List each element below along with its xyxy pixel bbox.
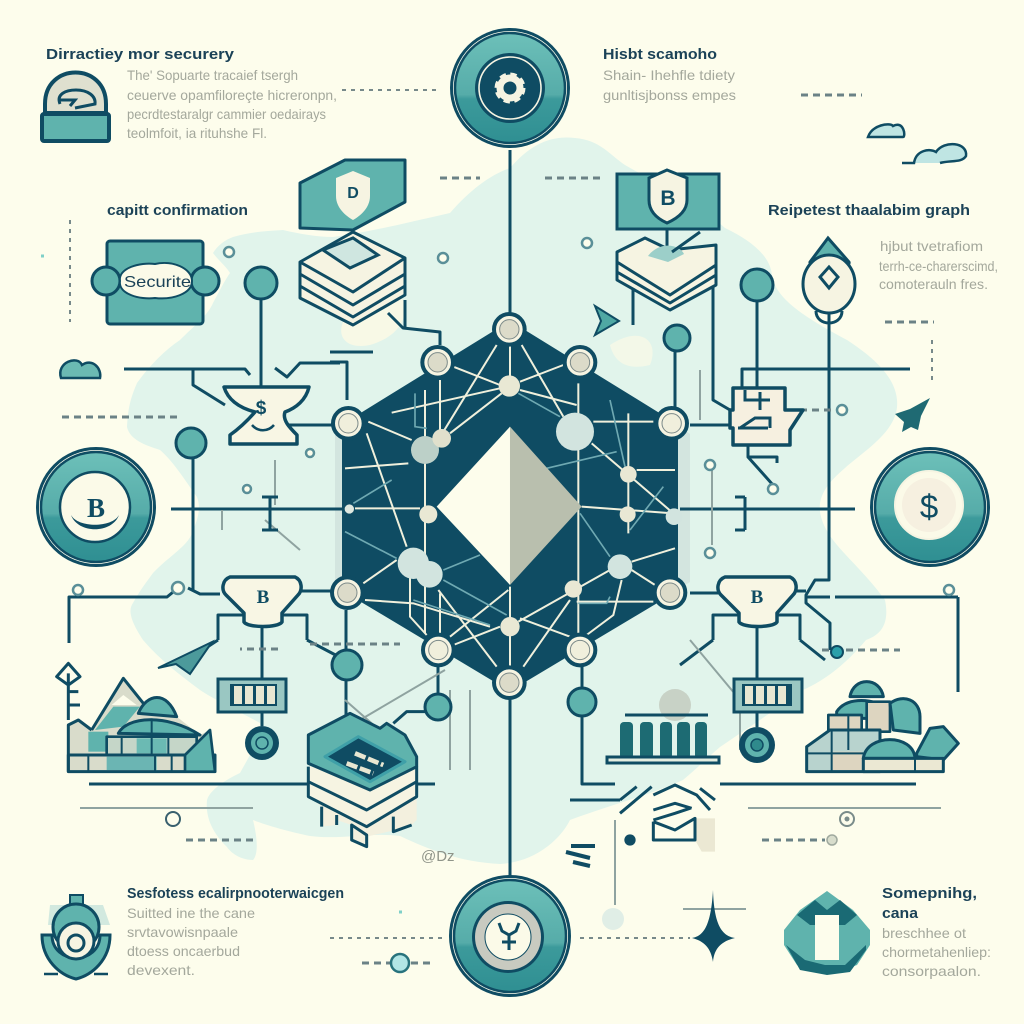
text block: bottom left — [127, 905, 255, 978]
left circle: bitcoin badge: B — [87, 493, 105, 523]
panel: Securite card: Securite — [124, 274, 191, 291]
icon: box upper right — [730, 388, 803, 445]
icon: hooded figure — [803, 238, 855, 323]
icon: money shield lower right: B — [751, 587, 764, 608]
icon: small cloud left — [60, 360, 100, 378]
text block: right — [879, 238, 998, 292]
heading: top right: Hisbt scamoho — [603, 46, 717, 63]
icon: mountain blocks — [57, 663, 215, 772]
icon: shield card right — [617, 170, 719, 229]
text block: top left — [127, 67, 337, 141]
text block: bottom right — [882, 925, 991, 979]
icon: server stack left — [300, 232, 405, 325]
text block: right: comoterauln fres. — [879, 276, 988, 292]
icon: server stack right — [617, 232, 716, 310]
small glyph marks: @Dz — [421, 848, 455, 865]
text block: top left: The' Sopuarte tracaief tsergh — [127, 67, 298, 83]
text block: bottom left: srvtavowisnpaale — [127, 924, 238, 940]
icon: money shield lower right — [718, 577, 796, 626]
right circle: dollar badge — [870, 447, 990, 567]
left circle: bitcoin badge — [36, 447, 156, 567]
heading: bottom right — [882, 885, 977, 922]
icon: dial right — [739, 727, 775, 763]
teal node circles — [176, 267, 773, 720]
icon: clouds — [868, 124, 966, 163]
icon: shield card right: B — [660, 187, 676, 210]
icon: money shield lower left: B — [257, 587, 270, 608]
top circle: gear badge — [450, 28, 570, 148]
heading: top left: Dirractiey mor securery — [46, 46, 235, 63]
icon: gauge lock — [42, 72, 109, 141]
text block: bottom left: dtoess oncaerbud — [127, 943, 240, 959]
teal accent links — [345, 393, 663, 625]
text block: top left: pecrdtestaralgr cammier oedairays — [127, 106, 326, 122]
text block: top right: Shain- Ihehfle tdiety — [603, 67, 735, 83]
text block: bottom left: devexent. — [127, 962, 195, 978]
icon: money shield lower left — [223, 577, 301, 626]
text block: right: terrh-ce-charerscimd, — [879, 258, 998, 274]
text block: bottom right: chormetahenliep: — [882, 944, 991, 960]
center diamond — [437, 427, 582, 585]
inner nodes — [345, 375, 682, 636]
text block: top right — [603, 67, 736, 103]
text block: right: hjbut tvetrafiom — [880, 238, 983, 254]
text block: bottom left: Suitted ine the cane — [127, 905, 255, 921]
outer nodes — [332, 314, 687, 698]
network links — [345, 343, 675, 667]
icon: shield card left — [300, 160, 405, 230]
icon: emblem bottom right — [784, 891, 870, 975]
icon: shield emblem bottom left — [42, 895, 110, 979]
text block: top right: gunltisjbonss empes — [603, 87, 736, 103]
small markers bottom — [41, 256, 854, 972]
icon: money shield upper left: $ — [256, 398, 267, 419]
heading: right graph: Reipetest thaalabim graph — [768, 202, 970, 219]
central hexagon network — [332, 314, 687, 698]
small ring nodes — [73, 238, 954, 595]
background mint cloud — [127, 137, 897, 864]
heading: bottom left: Sesfotess ecalirpnooterwaicgen — [127, 885, 344, 902]
icon: chevron arrow — [595, 306, 619, 335]
icon: rock pile — [807, 682, 958, 772]
icon: four-point star — [692, 890, 735, 962]
text block: top left: teolmfoit, ia rituhshe Fl. — [127, 125, 267, 141]
icon: shield card left: D — [347, 185, 359, 202]
heading: bottom right: Somepnihg, — [882, 885, 977, 902]
right circle: dollar badge: $ — [920, 488, 938, 525]
icon: paper plane right — [895, 398, 930, 432]
text block: bottom right: breschhee ot — [882, 925, 966, 941]
panel: Securite card — [92, 241, 219, 324]
icon: battery meter left — [218, 679, 286, 712]
connector lines — [62, 90, 958, 963]
icon: tower bars — [607, 689, 719, 763]
icon: dial left — [245, 726, 279, 760]
icon: paper plane left — [158, 642, 212, 674]
bottom circle: emblem badge — [449, 875, 571, 997]
icon: money shield upper left — [224, 387, 309, 444]
text block: top left: ceuerve opamfiloreçte hicreronpn, — [127, 87, 337, 103]
icon: isometric building — [308, 712, 427, 847]
icon: isometric box — [570, 785, 715, 852]
icon: battery meter right — [734, 679, 802, 712]
heading: bottom right: cana — [882, 905, 919, 922]
text block: bottom right: consorpaalon. — [882, 963, 981, 979]
heading: capitt confirmation: capitt confirmation — [107, 202, 248, 219]
small glyph marks — [421, 846, 595, 866]
